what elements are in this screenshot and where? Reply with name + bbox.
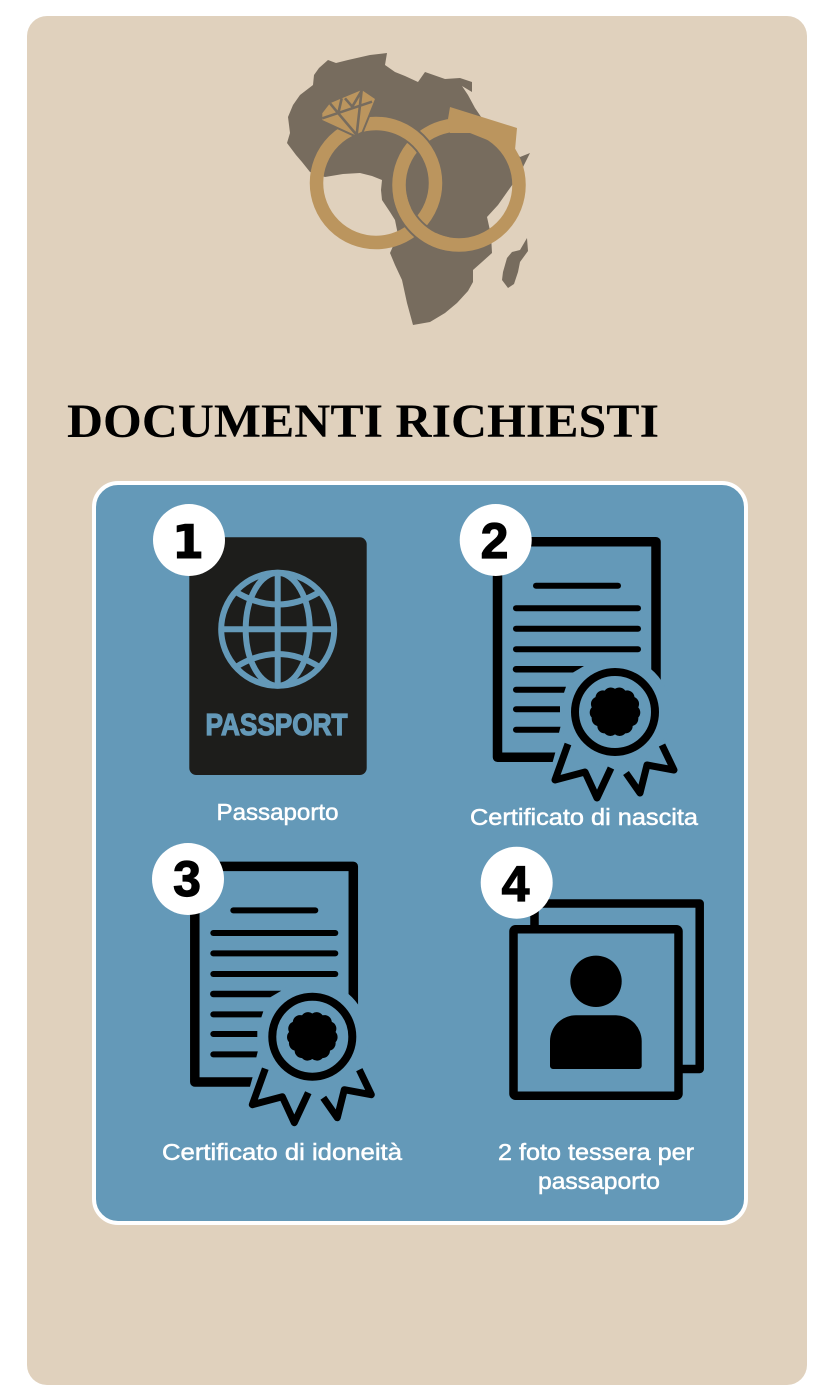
number badge 3: 3 [173,851,201,907]
label: 2 foto tessera per passaporto [498,1139,694,1194]
number badge 1: 1 [172,515,204,569]
Africa silhouette [287,53,530,325]
number badge 2 [460,504,532,576]
ribbons [555,744,674,798]
diamond [322,90,375,135]
right ring overlap [400,195,449,244]
item 2: birth certificate [460,504,698,830]
title: DOCUMENTI RICHIESTI [67,395,659,448]
number badge 2: 2 [481,513,508,569]
logo: Africa map with wedding rings [287,53,530,325]
label: passaporto: Passaporto [216,799,338,825]
right ring [399,107,519,245]
label: 2 foto tessera per passaporto: 2 foto tessera per [498,1139,694,1165]
number badge 4: 4 [502,856,530,912]
label: 2 foto tessera per passaporto: passaporto [538,1168,660,1194]
number badge 4 [481,847,553,919]
seal [272,997,352,1077]
Madagascar [502,238,528,288]
icon: certificate [498,542,674,798]
item 4: passport photos [481,847,700,1194]
label: certificato di idoneita: Certificato di idoneità [162,1139,402,1165]
icon: photos [514,904,700,1096]
passport wordmark: PASSPORT [206,707,348,742]
item 3: eligibility certificate [152,843,402,1165]
seal [575,672,655,752]
panel: documents [94,483,746,1223]
left ring [316,124,436,242]
number badge 3 [152,843,224,915]
number badge 1 [153,504,225,576]
icon: passport [189,537,367,775]
icon: globe [221,572,334,686]
item 1: passport [153,504,367,825]
label: certificato di nascita: Certificato di nascita [470,804,698,830]
ribbons [252,1069,371,1123]
icon: certificate [195,866,371,1123]
